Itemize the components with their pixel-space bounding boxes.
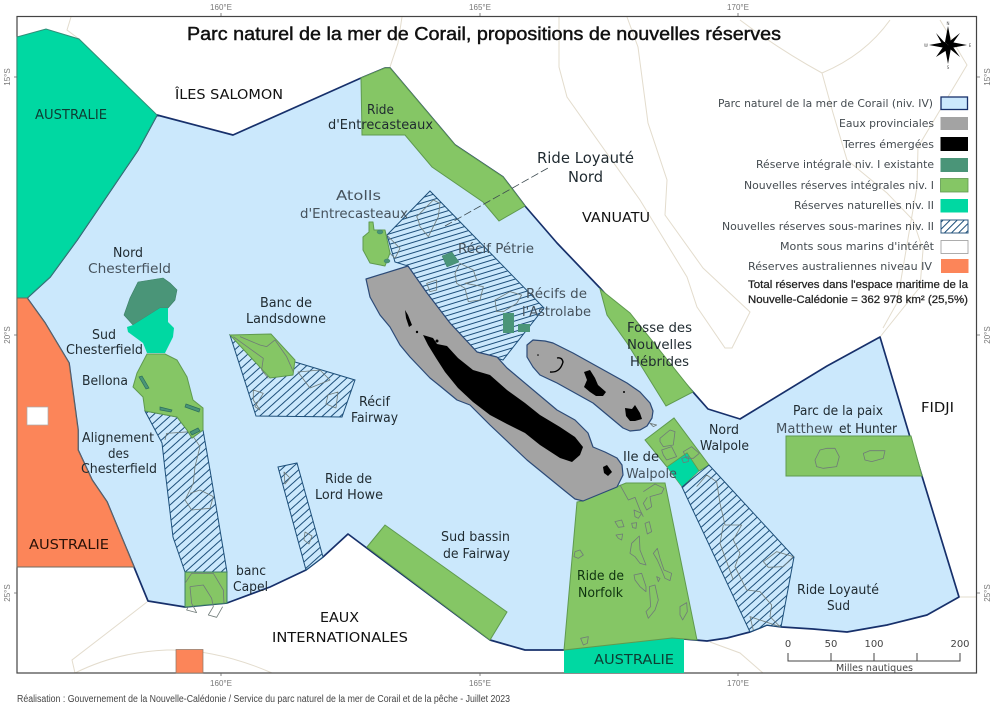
map labels: Fairway — [351, 411, 398, 426]
graticule ticks and labels: 170°E — [727, 3, 749, 12]
legend: Réserves naturelles niv. II — [794, 199, 934, 212]
map labels: banc — [236, 564, 266, 579]
map labels: de Fairway — [443, 547, 510, 562]
map labels: INTERNATIONALES — [272, 631, 408, 646]
legend total: Total réserves dans l'espace maritime de la — [748, 279, 969, 291]
map labels: Ride — [367, 103, 394, 118]
graticule ticks and labels: 25°S — [983, 584, 992, 602]
map labels: Norfolk — [578, 586, 623, 601]
map labels: FIDJI — [921, 401, 954, 416]
map labels: Bellona — [82, 374, 128, 389]
zone: Eaux provinciales, Grande Terre — [366, 266, 623, 501]
legend: Nouvelles réserves sous-marines niv. II — [722, 220, 934, 233]
reefs: Ride Loyauté Nord — [387, 200, 657, 427]
land: Grande Terre — [423, 335, 583, 462]
zone: Australia south level IV reserve — [176, 650, 203, 673]
zone: Australia north-west natural reserve — [17, 29, 157, 298]
zone: Nord Chesterfield existing reserve — [124, 278, 177, 325]
map labels: Chesterfield — [81, 462, 157, 477]
zone: Australia south natural reserve — [564, 638, 684, 673]
graticule ticks and labels: 165°E — [469, 679, 491, 688]
map labels: Nouvelles — [627, 338, 692, 353]
map labels: Chesterfield — [66, 343, 143, 358]
map labels: Matthew — [776, 422, 833, 437]
zone: Parc de la paix Matthew et Hunter — [786, 436, 922, 476]
title: Parc naturel de la mer de Corail, propositions de nouvelles réserves — [187, 24, 781, 44]
map labels — [29, 87, 954, 668]
map labels: Ride Loyauté — [797, 583, 879, 598]
reefs: Alignement des Chesterfield — [165, 432, 213, 510]
seamount of interest: white square — [27, 407, 48, 425]
legend: Parc naturel de la mer de Corail (niv. IV) — [718, 97, 933, 110]
map labels: AUSTRALIE — [29, 538, 109, 553]
panel: Coral Sea natural park — [27, 68, 959, 650]
map labels: Nord — [709, 423, 739, 438]
scale bar: 0 — [785, 639, 791, 650]
scale bar — [785, 639, 970, 674]
zone: banc Capel — [185, 572, 227, 607]
zone: Ile de Walpole natural reserve — [667, 453, 699, 487]
map labels: VANUATU — [582, 211, 650, 226]
scale bar: 100 — [864, 639, 884, 650]
zone: Eaux provinciales, Îles Loyauté — [527, 340, 653, 431]
map labels: Ride Loyauté — [537, 149, 634, 167]
map labels: Ride de — [577, 569, 624, 584]
existing reserves: Bellona bars — [139, 376, 200, 435]
map labels: Récifs de — [526, 287, 587, 302]
legend: Réserve intégrale niv. I existante — [756, 158, 934, 171]
map labels: Lord Howe — [315, 488, 383, 503]
zone: Australia level IV reserve — [17, 298, 134, 567]
legend: Nouvelles réserves intégrales niv. I — [744, 179, 934, 192]
map labels: Nord — [568, 168, 603, 186]
graticule ticks and labels: 20°S — [3, 326, 12, 344]
map labels: Sud — [827, 599, 850, 614]
zone: Banc de Landsdowne green — [230, 334, 295, 378]
scale bar: Milles nautiques — [836, 663, 913, 674]
graticule ticks and labels: 160°E — [210, 3, 232, 12]
map labels: Parc de la paix — [793, 404, 883, 419]
graticule ticks and labels: 20°S — [983, 326, 992, 344]
legend total: Nouvelle-Calédonie = 362 978 km² (25,5%) — [748, 294, 968, 306]
map labels: Banc de — [260, 296, 312, 311]
land: Ouvéa atoll — [550, 358, 563, 372]
zone: Nord Walpole — [645, 418, 709, 471]
map labels: Récif — [359, 395, 390, 410]
map labels: Landsdowne — [246, 312, 326, 327]
map labels: Ride de — [325, 472, 372, 487]
map labels: des — [108, 447, 129, 462]
icon: compass rose: E — [969, 43, 972, 48]
zone: Sud Chesterfield natural reserve — [127, 308, 174, 353]
map labels: l'Astrolabe — [522, 305, 591, 320]
leader line: Ride Loyauté Nord — [445, 168, 548, 226]
graticule ticks and labels: 15°S — [983, 68, 992, 86]
map labels: Walpole — [626, 467, 677, 482]
map labels: ÎLES SALOMON — [174, 87, 283, 103]
map labels: Fosse des — [627, 321, 692, 336]
map labels: Nord — [113, 246, 143, 261]
zone: Ride de Lord Howe hatch — [278, 463, 323, 570]
graticule ticks and labels: 170°E — [727, 679, 749, 688]
map labels: Hébrides — [630, 355, 689, 370]
zone: Banc de Landsdowne hatch — [230, 335, 355, 417]
icon: compass rose — [924, 21, 972, 70]
existing reserve: Récifs de l'Astrolabe — [503, 313, 530, 333]
icon: compass rose: W — [924, 43, 928, 48]
zone: Ride Loyauté Nord hatch — [387, 191, 544, 360]
map labels: Récif Pétrie — [458, 242, 534, 257]
zone: Sud bassin de Fairway — [367, 525, 507, 640]
icon: compass rose: N — [946, 21, 950, 26]
map labels: AUSTRALIE — [35, 108, 107, 123]
reefs: Ride de Norfolk — [574, 484, 687, 645]
map labels: Chesterfield — [88, 262, 171, 277]
map labels: Capel — [233, 580, 268, 595]
scale bar: 200 — [950, 639, 970, 650]
graticule ticks and labels: 15°S — [3, 68, 12, 86]
reefs: Nord Walpole — [660, 430, 699, 463]
reserves: Atolls d'Entrecasteaux — [377, 230, 390, 263]
zone: Fosse des Nouvelles Hébrides — [600, 289, 693, 406]
zone: Ride Loyauté Sud hatch — [682, 465, 794, 632]
graticule ticks and labels: 160°E — [210, 679, 232, 688]
reefs: Ride Loyauté Sud — [697, 475, 793, 630]
graticule ticks and labels: 165°E — [469, 3, 491, 12]
reefs: Lord Howe — [284, 472, 312, 544]
zone: Bellona integral reserve — [133, 354, 203, 438]
zone: Ride d'Entrecasteaux — [361, 68, 525, 221]
legend: Monts sous marins d'intérêt — [780, 240, 935, 253]
map labels: EAUX — [320, 611, 359, 626]
map labels: Sud bassin — [441, 530, 510, 545]
zone: Alignement des Chesterfield hatch — [145, 411, 227, 572]
legend: Eaux provinciales — [839, 117, 934, 130]
map labels: Sud — [92, 328, 116, 343]
reefs: Landsdowne and Fairway — [233, 337, 338, 410]
land: islets and Loyalty Islands — [405, 310, 642, 476]
scale bar: 50 — [825, 639, 837, 650]
map labels: Alignement — [82, 431, 154, 446]
legend: Réserves australiennes niveau IV — [748, 260, 932, 273]
existing reserve: Récif Pétrie — [442, 252, 459, 267]
seamount: banc Capel outline — [185, 573, 224, 617]
map labels: Atolls — [336, 189, 381, 204]
map labels: Ile de — [623, 450, 659, 465]
map labels: d'Entrecasteaux — [328, 118, 433, 133]
map labels: et Hunter — [839, 422, 898, 437]
map labels: AUSTRALIE — [594, 653, 674, 668]
graticule ticks and labels: 25°S — [3, 584, 12, 602]
credit line: Réalisation : Gouvernement de la Nouvelle-Calédonie / Service du parc naturel de la mer de Corail et de la pêche - Juillet 2023 — [17, 694, 510, 705]
zone: Ride de Norfolk — [564, 483, 697, 650]
legend total — [748, 279, 969, 306]
reefs: Matthew et Hunter — [815, 448, 885, 468]
map labels: Walpole — [700, 439, 749, 454]
legend: Terres émergées — [842, 138, 934, 151]
legend — [718, 97, 968, 273]
zone: Atolls d'Entrecasteaux — [363, 222, 390, 266]
map labels: d'Entrecasteaux — [300, 207, 408, 222]
icon: compass rose: S — [947, 65, 950, 70]
